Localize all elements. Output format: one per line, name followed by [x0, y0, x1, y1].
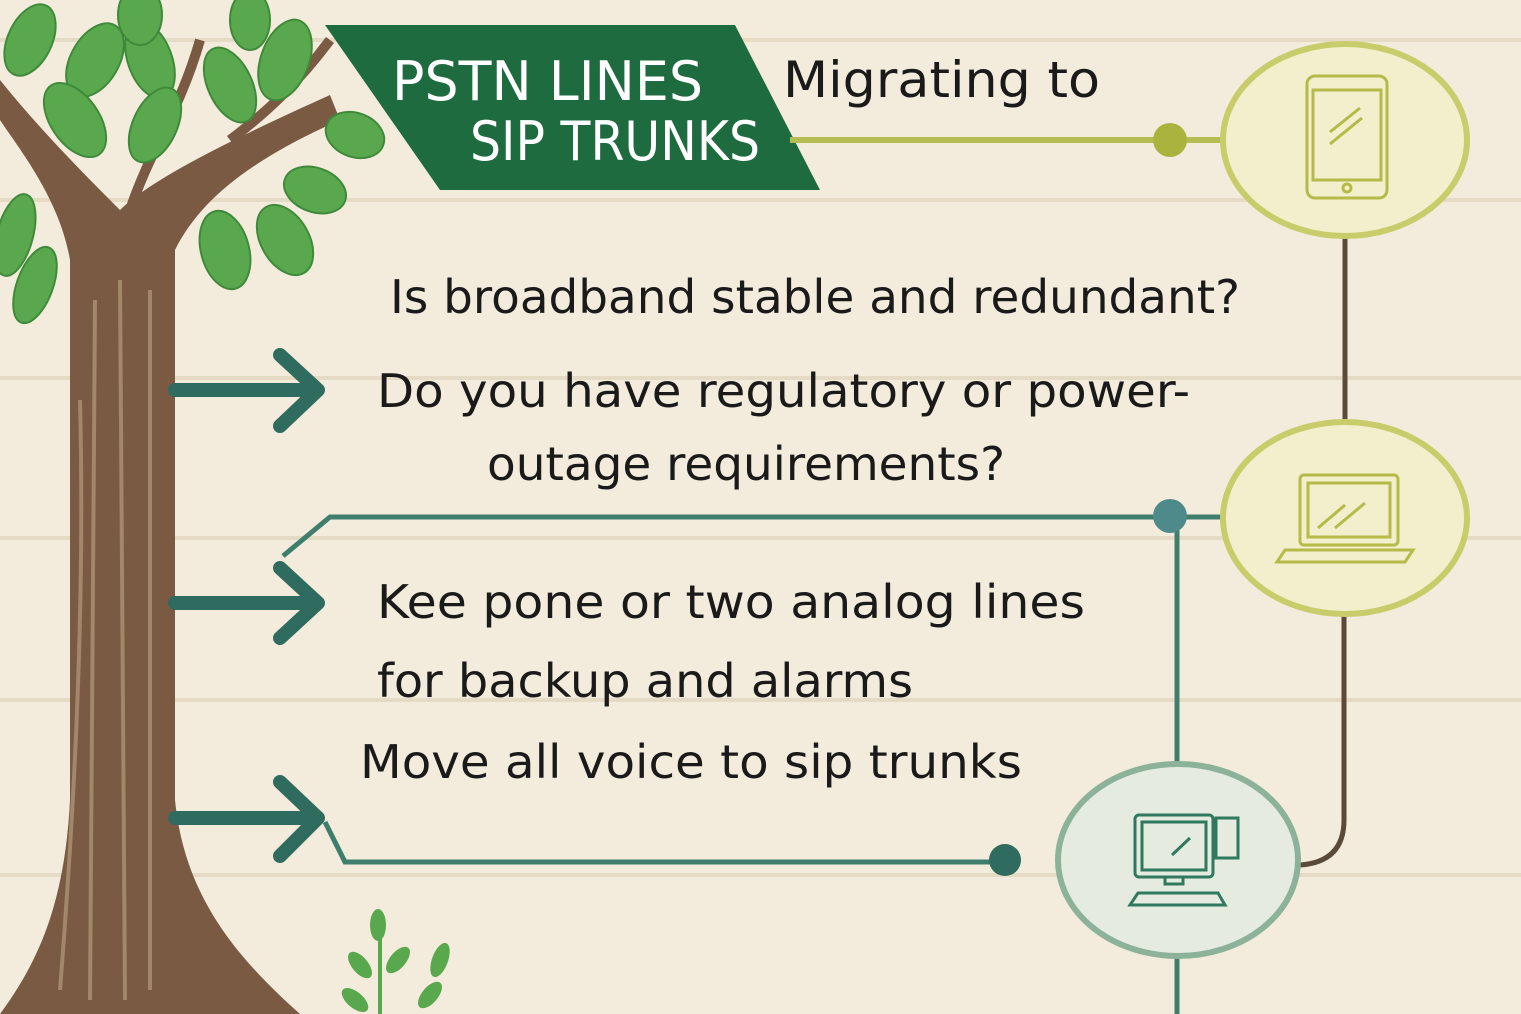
option: keep analog: Kee pone or two analog lines	[377, 575, 1085, 629]
question 1: Is broadband stable and redundant?	[390, 270, 1240, 324]
arrows	[175, 355, 318, 856]
subtitle: Migrating to	[783, 51, 1100, 109]
question 2	[377, 364, 1190, 491]
title banner: PSTN LINES	[392, 50, 703, 113]
title banner: SIP TRUNKS	[470, 110, 760, 173]
option: keep analog	[377, 575, 1085, 708]
question 2: Do you have regulatory or power-	[377, 364, 1190, 418]
question 2: outage requirements?	[487, 437, 1005, 491]
small plant	[338, 909, 454, 1014]
teal flow lines	[283, 517, 1225, 1014]
option: move all: Move all voice to sip trunks	[360, 735, 1022, 789]
olive connector	[790, 123, 1225, 157]
brown connectors	[1300, 232, 1345, 865]
circle: desktop	[1058, 764, 1298, 956]
title banner	[325, 25, 820, 190]
circle: phone	[1223, 44, 1467, 236]
option: keep analog: for backup and alarms	[377, 654, 913, 708]
tree	[0, 0, 391, 1014]
circle: laptop	[1223, 422, 1467, 614]
